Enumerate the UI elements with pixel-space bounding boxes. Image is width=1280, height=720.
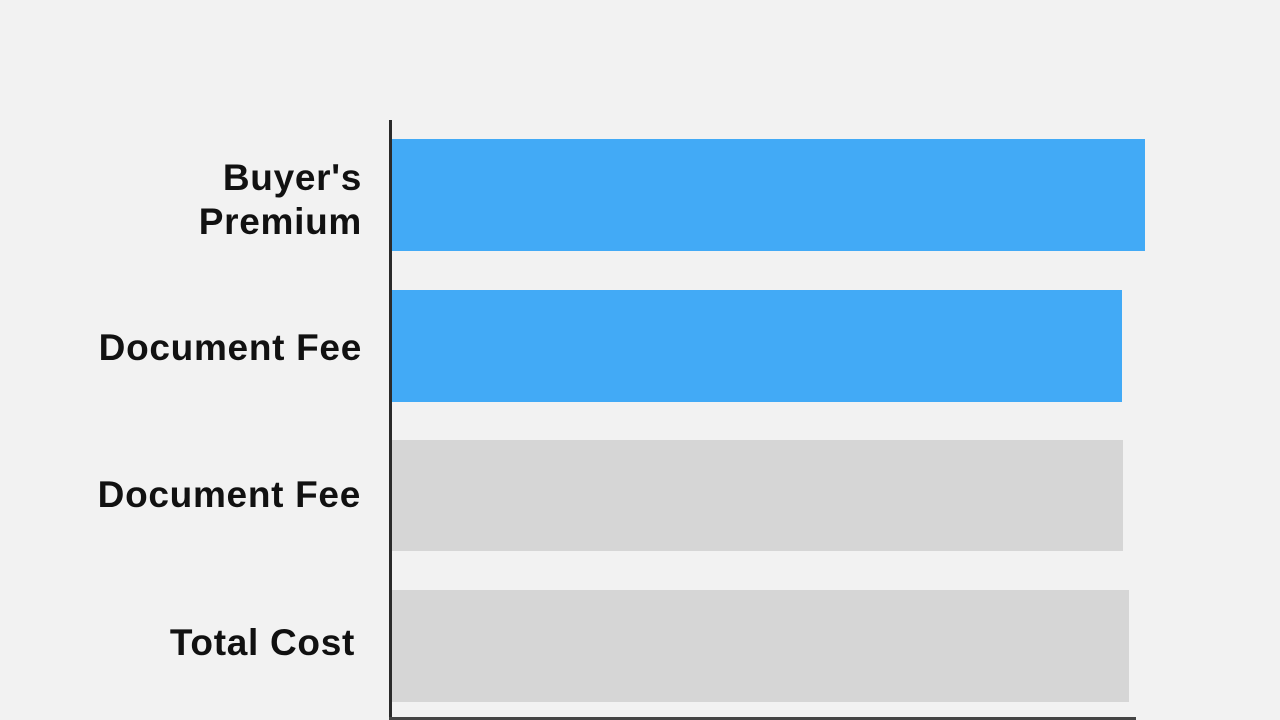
bar: Buyer's Premium bbox=[392, 139, 1145, 251]
label: Document Fee (2): Document Fee bbox=[98, 474, 361, 515]
y axis bbox=[389, 120, 392, 720]
label: Buyer's Premium: Buyer's bbox=[223, 157, 362, 198]
bar: Document Fee bbox=[392, 290, 1122, 402]
label: Buyer's Premium: Premium bbox=[199, 201, 362, 242]
x axis bbox=[389, 717, 1136, 720]
label: Buyer's Premium bbox=[199, 157, 362, 242]
bar: Document Fee gray bbox=[392, 440, 1123, 551]
label: Document Fee: Document Fee bbox=[99, 327, 362, 368]
bar: Total Cost bbox=[392, 590, 1129, 702]
label: Total Cost: Total Cost bbox=[170, 622, 355, 663]
